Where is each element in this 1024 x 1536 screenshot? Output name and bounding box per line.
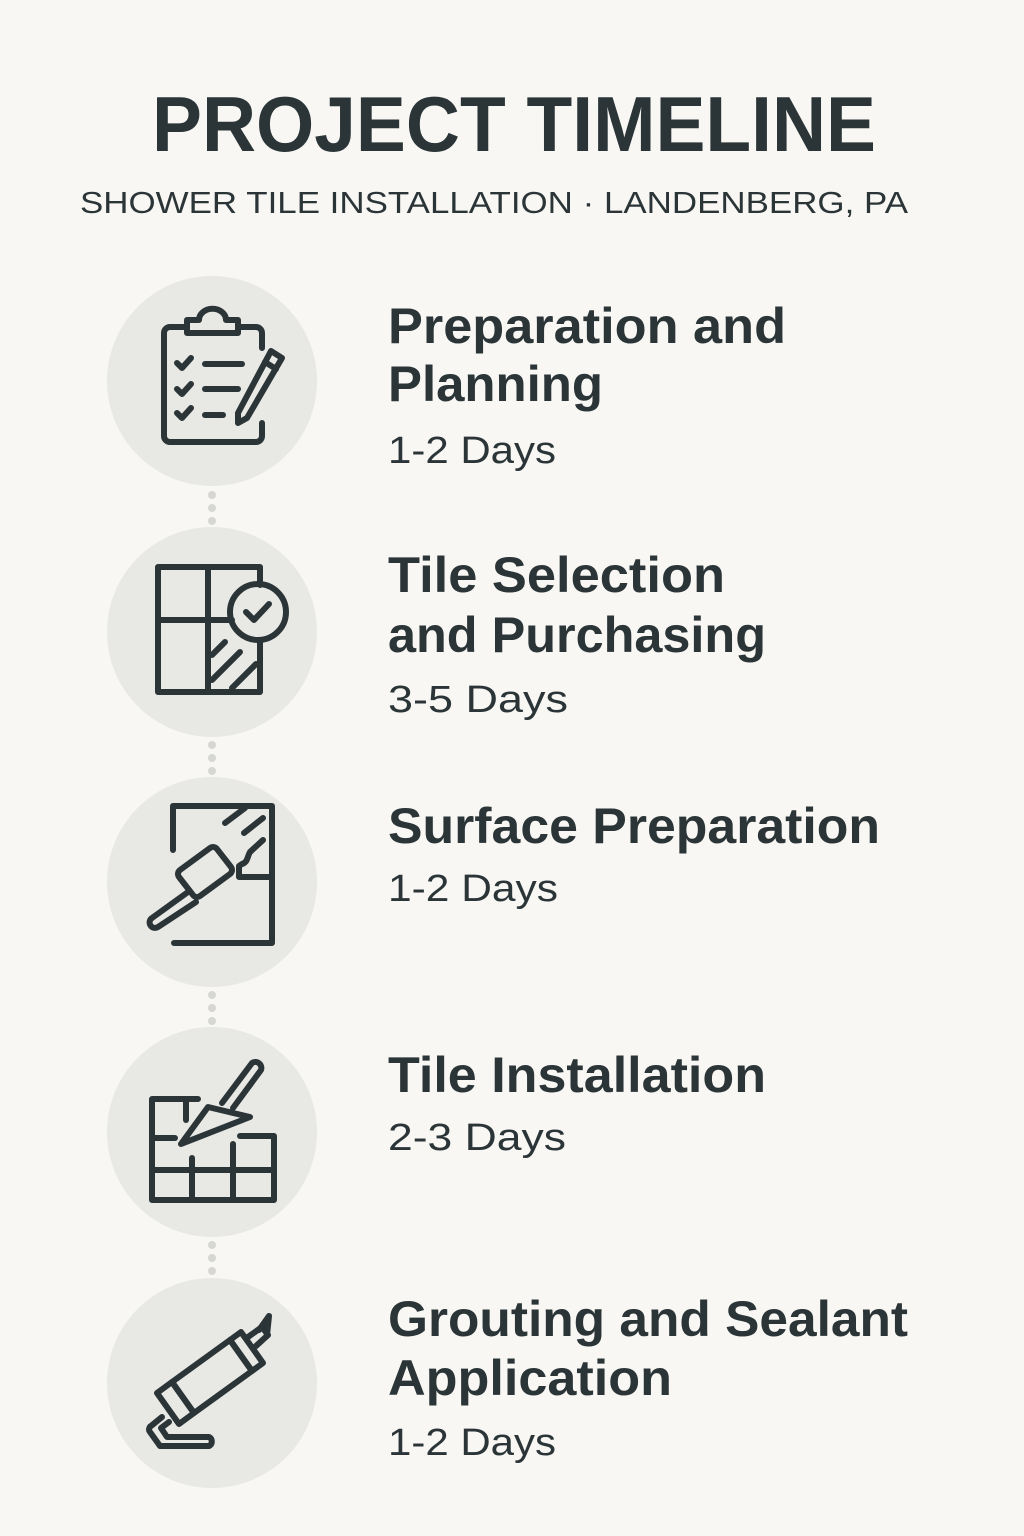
step 4: tile installation xyxy=(107,1027,766,1237)
timeline connectors xyxy=(208,491,216,1275)
heading: Grouting and Sealant xyxy=(388,1291,908,1347)
heading: Tile Installation xyxy=(388,1047,766,1103)
duration: 3-5 Days xyxy=(388,679,568,721)
step 5: grouting and sealant: Application xyxy=(388,1350,672,1406)
duration: 1-2 Days xyxy=(388,1422,556,1464)
step 1: preparation and planning: Planning xyxy=(388,356,603,412)
step 3: surface preparation xyxy=(107,777,880,987)
duration: 2-3 Days xyxy=(388,1117,566,1159)
icon: tiles with check xyxy=(107,527,317,737)
step 5: grouting and sealant xyxy=(107,1278,908,1488)
step 1: preparation and planning xyxy=(107,276,786,486)
heading: Preparation and xyxy=(388,298,786,354)
icon: trowel on tiles xyxy=(107,1027,317,1237)
duration: 1-2 Days xyxy=(388,430,556,472)
duration: 1-2 Days xyxy=(388,868,558,910)
title: PROJECT TIMELINE xyxy=(152,80,876,168)
icon: trowel on wall xyxy=(107,777,317,987)
step 2: tile selection: and Purchasing xyxy=(388,607,766,663)
heading: Tile Selection xyxy=(388,547,725,603)
icon: clipboard xyxy=(107,276,317,486)
heading: Surface Preparation xyxy=(388,798,880,854)
icon: caulk tube xyxy=(107,1278,317,1488)
step 2: tile selection xyxy=(107,527,766,737)
subtitle: SHOWER TILE INSTALLATION · LANDENBERG, PA xyxy=(80,185,908,220)
